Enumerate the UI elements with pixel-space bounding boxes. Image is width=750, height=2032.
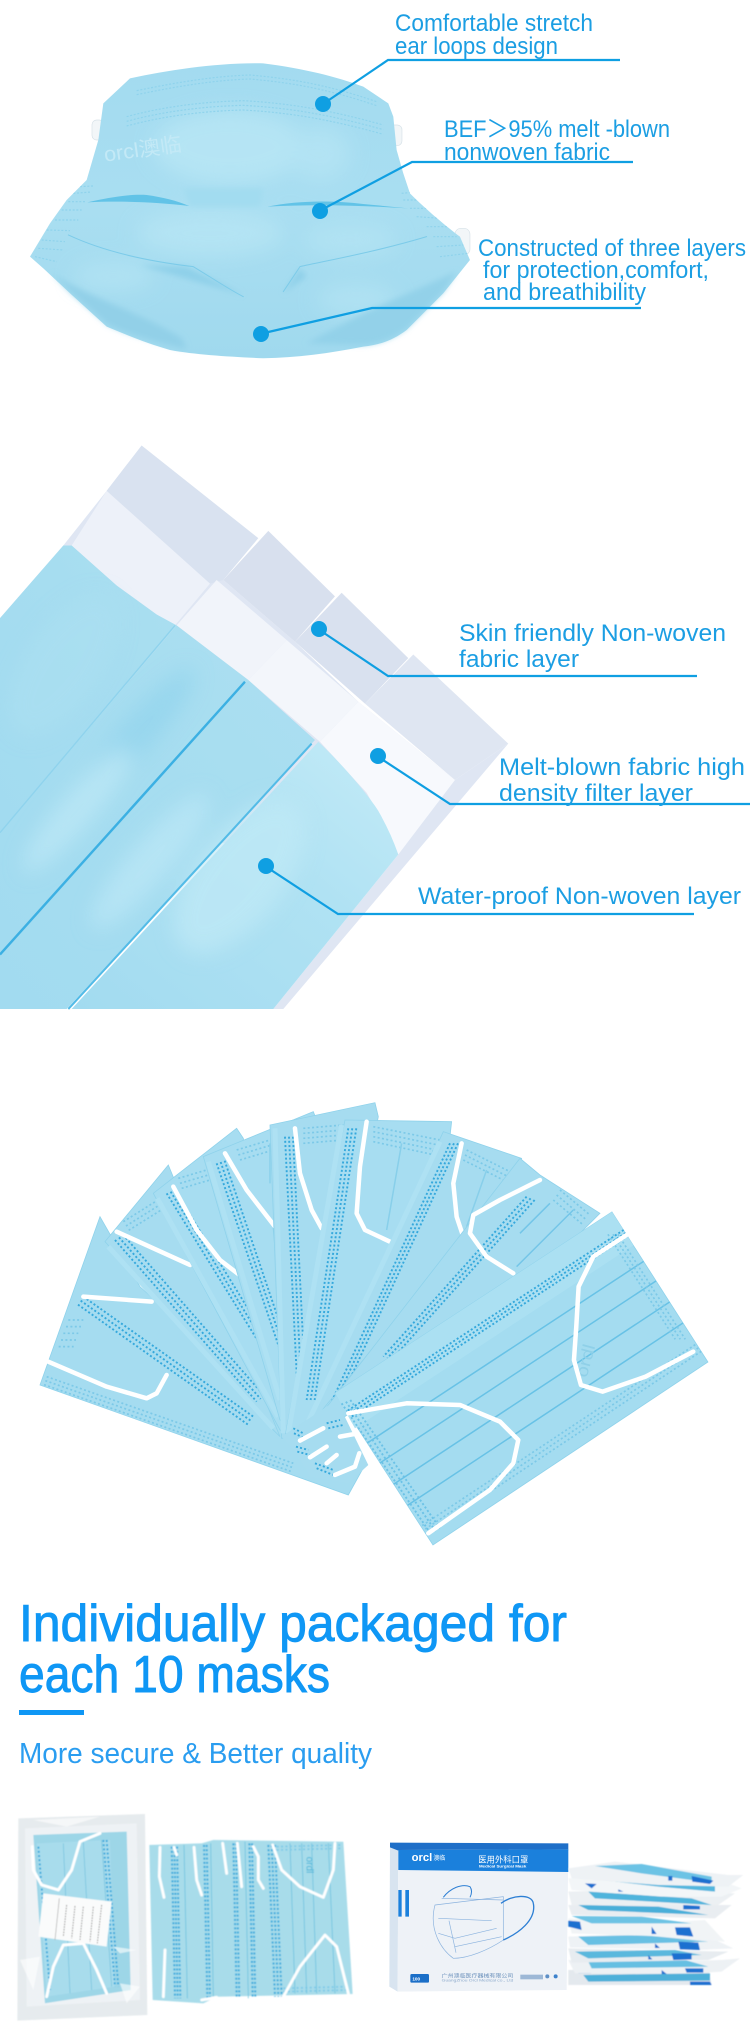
callout: skin friendly layer xyxy=(311,620,726,676)
mask blade 7 xyxy=(303,1132,522,1433)
pleat 1 grey xyxy=(107,445,258,584)
blue pleat 2 xyxy=(0,625,248,954)
mask blade 4 xyxy=(203,1112,317,1437)
callout: BEF melt-blown: BEF＞95% melt -blown xyxy=(444,116,670,143)
mask blade 3 xyxy=(153,1128,293,1437)
pleat 2 grey xyxy=(223,531,335,642)
box blue banner: 医用外科口罩 xyxy=(478,1854,528,1864)
mask blade 2 xyxy=(105,1165,280,1437)
photo: stack of loose masks: ordl xyxy=(304,1857,315,1873)
callout: melt-blown layer: density filter layer xyxy=(499,780,693,807)
soft highlights xyxy=(73,110,397,317)
mask blade 6 xyxy=(285,1120,452,1437)
sachet 6 xyxy=(568,1933,733,1950)
callout: three layers xyxy=(253,235,746,342)
box mask line art xyxy=(433,1886,534,1958)
callout: water-proof layer: Water-proof Non-woven layer xyxy=(418,883,741,910)
box footer text: GuangZhou Orcl Medical co., Ltd xyxy=(442,1978,513,1983)
pleat 3 grey xyxy=(295,593,408,704)
callout: ear loops: Comfortable stretch xyxy=(395,10,593,37)
blue pleat 4 front xyxy=(72,742,398,1009)
seams xyxy=(0,625,312,1009)
sachet 7 xyxy=(568,1948,728,1963)
sachet 5 xyxy=(568,1916,725,1942)
lower shaded facets xyxy=(52,188,457,349)
white bands xyxy=(72,491,210,625)
subheading: More secure & Better quality xyxy=(19,1738,372,1770)
sachet 9 xyxy=(568,1967,712,1985)
blue pleat 1 xyxy=(0,545,177,833)
box blue banner: 澳临 xyxy=(433,1854,445,1862)
box blue banner: orcl xyxy=(412,1852,432,1864)
box blue banner xyxy=(398,1849,568,1872)
photo: product box xyxy=(389,1843,568,1992)
heading: individually packaged xyxy=(19,1595,567,1704)
mask blade 10 front xyxy=(335,1212,708,1545)
mask blade 5 xyxy=(270,1103,378,1438)
box footer text xyxy=(410,1971,558,1983)
callout: skin friendly layer: fabric layer xyxy=(459,646,579,673)
photo: sealed pack of masks xyxy=(17,1814,147,2021)
pleat folds xyxy=(87,195,408,208)
photo: front view of mask xyxy=(30,63,470,358)
folded ear loops at pivot xyxy=(282,1400,368,1483)
mask blade 8 xyxy=(317,1158,600,1427)
section: layer structure xyxy=(0,445,750,1009)
callout: ear loops: ear loops design xyxy=(395,33,558,60)
blue pleat 3 xyxy=(0,680,315,1009)
photo: fan of ten masks xyxy=(40,1103,708,1545)
callout: three layers: and breathibility xyxy=(483,279,646,306)
mesh dot bands xyxy=(35,75,468,262)
soft highlights and shade xyxy=(0,575,330,978)
lavender rim xyxy=(0,445,508,1009)
callout: BEF melt-blown: nonwoven fabric xyxy=(444,139,610,166)
section: mask features xyxy=(30,10,746,358)
photo: stack of individual sachets xyxy=(568,1862,743,1985)
sachet 1 xyxy=(568,1862,743,1887)
callout: three layers: for protection,comfort, xyxy=(483,257,709,284)
callout: melt-blown layer: Melt-blown fabric high xyxy=(499,754,745,781)
heading: individually packaged: each 10 masks xyxy=(19,1646,330,1704)
accent bar xyxy=(19,1710,84,1715)
mask blade 1 xyxy=(40,1217,365,1495)
logo mark: orcl澳临 xyxy=(102,133,183,167)
sachet 2 xyxy=(568,1875,742,1897)
callout: melt-blown layer xyxy=(370,748,750,807)
mask blade 10 front: ordl xyxy=(571,1342,599,1379)
callout: water-proof layer xyxy=(258,858,741,914)
box footer text: 广州澳临医疗器械有限公司 xyxy=(442,1971,513,1979)
mask body xyxy=(30,63,470,358)
callout: BEF melt-blown xyxy=(312,116,670,219)
heading: individually packaged: Individually packaged for xyxy=(19,1595,567,1653)
box blue banner: Medical Surgical Mask xyxy=(479,1863,527,1868)
callout: ear loops xyxy=(315,10,620,112)
pleat 4 grey xyxy=(365,655,508,780)
callout: skin friendly layer: Skin friendly Non-woven xyxy=(459,620,726,647)
ear loop stubs xyxy=(92,120,470,255)
sachet 8 xyxy=(568,1958,740,1974)
label sticker xyxy=(38,1893,112,1947)
box footer text: 100 xyxy=(412,1976,421,1981)
photo: layered mask fabric xyxy=(0,445,508,1009)
sachet 4 xyxy=(568,1905,732,1918)
photo: stack of loose masks xyxy=(149,1840,353,2003)
sachet 3 xyxy=(568,1890,735,1909)
